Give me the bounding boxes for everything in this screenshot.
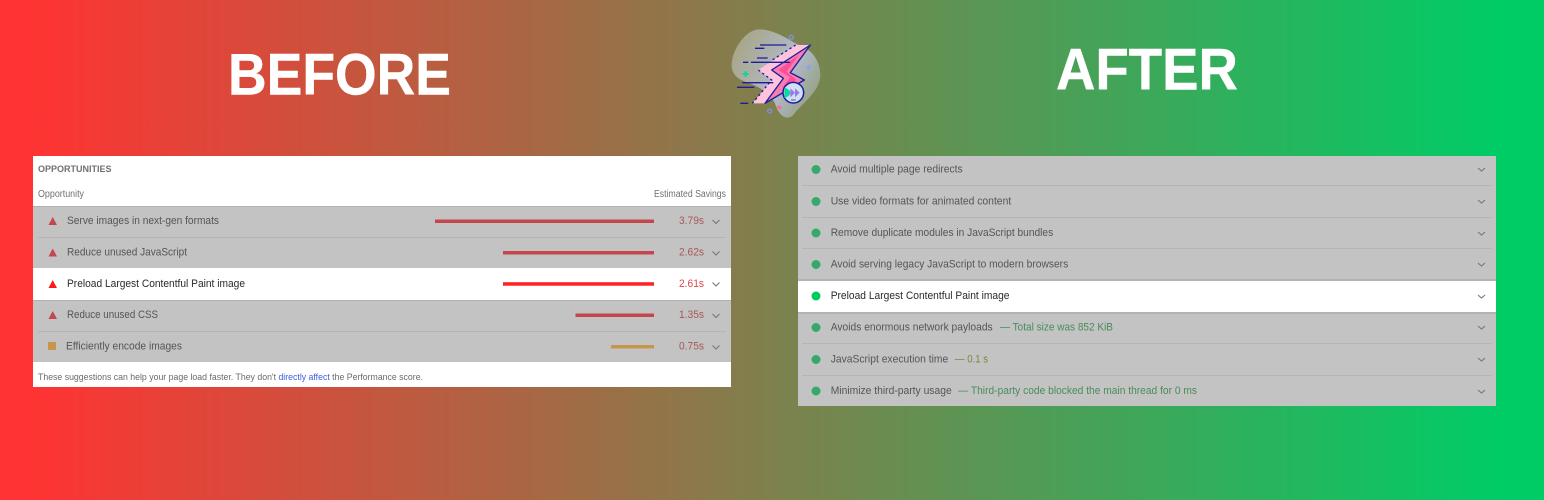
row: duplicate modules: [812, 227, 1485, 239]
row: duplicate modules: Remove duplicate modules in JavaScript bundles: [831, 227, 1054, 239]
row: legacy javascript: [812, 258, 1485, 270]
heading: after: AFTER: [1056, 38, 1238, 102]
panel: after audits: [798, 156, 1496, 406]
row: redirects: [812, 164, 1485, 176]
row: third-party usage: Minimize third-party usage: [831, 385, 952, 397]
column header: opportunity: Opportunity: [38, 189, 84, 200]
row: unused css: 1.35s: [679, 309, 704, 321]
gray rows top: [33, 206, 731, 268]
row: video formats: [812, 196, 1485, 208]
gray rows bottom: [33, 300, 731, 362]
row: unused javascript: [48, 246, 720, 258]
highlighted row background: [798, 281, 1496, 312]
row: video formats: Use video formats for animated content: [831, 196, 1011, 208]
row: third-party usage: [812, 385, 1485, 397]
row: encode images: Efficiently encode images: [66, 340, 182, 352]
panel: before opportunities: [33, 156, 731, 387]
heading: before: BEFORE: [228, 42, 451, 108]
icon: lightning bolt logo: [732, 29, 820, 118]
row: encode images: [48, 340, 720, 352]
row: redirects: Avoid multiple page redirects: [831, 164, 963, 176]
row: preload lcp image highlighted: Preload Largest Contentful Paint image: [831, 290, 1010, 302]
row: encode images: 0.75s: [679, 340, 704, 352]
row: network payloads: [812, 322, 1485, 334]
row: unused javascript: Reduce unused JavaScript: [67, 246, 187, 258]
row: unused css: [48, 309, 720, 321]
footnote: These suggestions can help your page load faster. They don't directly affect the Performance score.: [38, 372, 423, 383]
row: preload lcp image highlighted: [812, 290, 1485, 302]
column header: estimated savings: Estimated Savings: [654, 189, 726, 200]
row: network payloads: Avoids enormous network payloads: [831, 322, 993, 334]
row: third-party usage: — Third-party code blocked the main thread for 0 ms: [958, 385, 1197, 397]
row: legacy javascript: Avoid serving legacy JavaScript to modern browsers: [831, 258, 1069, 270]
row: network payloads: — Total size was 852 KiB: [1000, 322, 1113, 334]
row: unused javascript: 2.62s: [679, 246, 704, 258]
row: execution time: JavaScript execution time: [831, 354, 948, 366]
row: unused css: Reduce unused CSS: [67, 309, 158, 321]
row: preload lcp image highlighted: Preload Largest Contentful Paint image: [67, 278, 245, 290]
row: preload lcp image highlighted: [48, 278, 720, 290]
heading: opportunities: OPPORTUNITIES: [38, 164, 112, 174]
row: execution time: [812, 354, 1485, 366]
row: next-gen formats: Serve images in next-gen formats: [67, 215, 219, 227]
row: next-gen formats: [48, 215, 720, 227]
row: preload lcp image highlighted: 2.61s: [679, 278, 704, 290]
row: execution time: — 0.1 s: [955, 354, 988, 366]
row: next-gen formats: 3.79s: [679, 215, 704, 227]
